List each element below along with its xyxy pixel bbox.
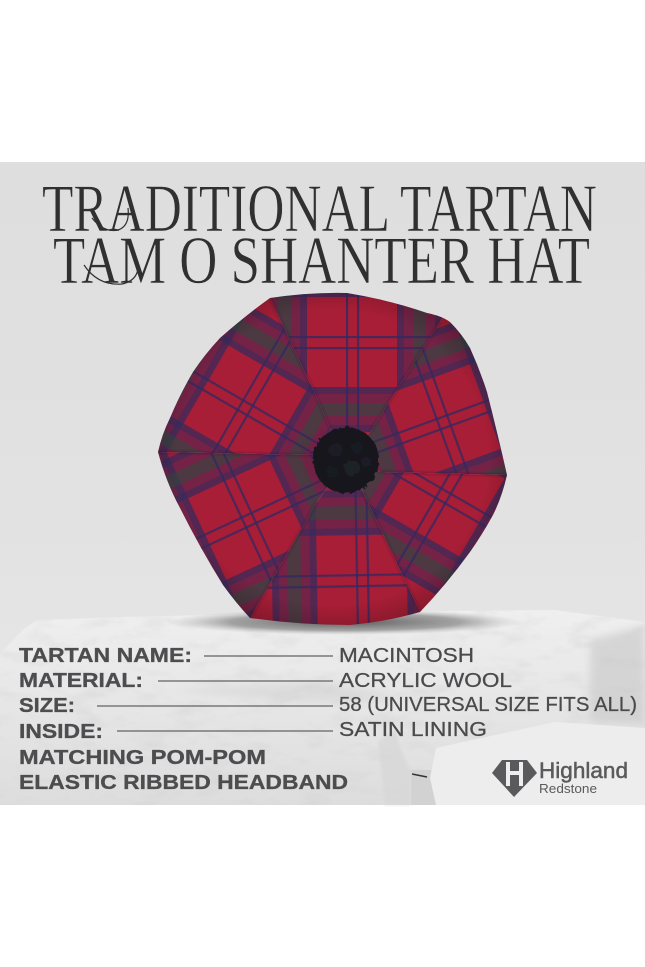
brand name: Highland <box>539 758 628 783</box>
spec labels <box>19 644 348 794</box>
spec values <box>339 645 637 741</box>
brand name <box>539 758 628 796</box>
spec values: 58 (UNIVERSAL SIZE FITS ALL) <box>339 694 637 716</box>
spec labels: ELASTIC RIBBED HEADBAND <box>19 771 348 794</box>
icon: logo diamond <box>492 760 537 797</box>
tartan hat <box>158 292 507 625</box>
rock pedestal <box>0 610 645 805</box>
hat panel: bottom <box>250 488 420 625</box>
hat panel: upper left <box>158 298 332 455</box>
pom-pom <box>313 427 379 493</box>
spec values: ACRYLIC WOOL <box>339 670 512 692</box>
spec labels: MATERIAL: <box>19 669 143 692</box>
hat panel: top <box>270 292 443 435</box>
spec labels: SIZE: <box>19 694 75 717</box>
hat panel: lower right <box>361 471 507 612</box>
grey backdrop panel <box>0 162 645 805</box>
title <box>42 170 597 298</box>
leader lines <box>97 656 333 731</box>
spec labels: MATCHING POM-POM <box>19 746 266 769</box>
brand name: Redstone <box>539 781 597 796</box>
hat panel: lower left <box>158 452 328 618</box>
hat seams <box>158 298 507 618</box>
spec values: SATIN LINING <box>339 719 487 741</box>
hat edge shading <box>150 285 515 630</box>
hat shadow <box>167 609 523 635</box>
spec labels: INSIDE: <box>19 720 103 743</box>
brand logo <box>492 758 628 797</box>
hat panel: upper right <box>368 318 507 475</box>
spec values: MACINTOSH <box>339 645 474 667</box>
spec labels: TARTAN NAME: <box>19 644 192 667</box>
